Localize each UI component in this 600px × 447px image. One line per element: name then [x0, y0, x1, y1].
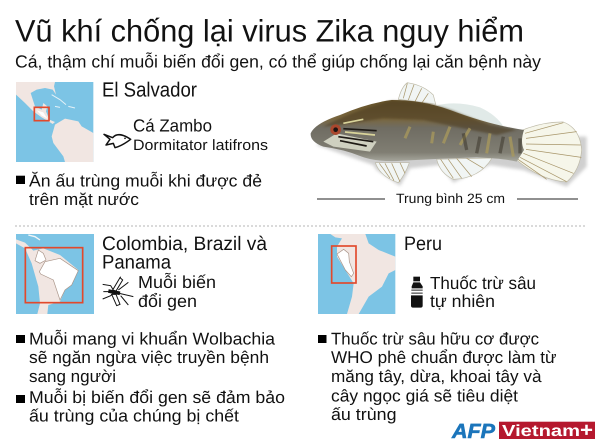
label: modified mosquito: [138, 272, 216, 311]
bullet text: trên mặt nước: [29, 190, 140, 209]
heading: Colombia, Brazil và Panama: Colombia, Brazil và: [102, 233, 267, 255]
bullet text: insecticide: măng tây, dừa, khoai tây và: [331, 367, 542, 386]
map: Peru: [318, 234, 395, 314]
icon: bottle: [411, 277, 423, 308]
species name: Cá Zambo: [133, 116, 212, 136]
icon: mosquito: [103, 277, 133, 306]
panel: Peru: [318, 233, 556, 424]
heading: Colombia, Brazil và Panama: [102, 233, 267, 274]
icon: fish: [104, 134, 131, 148]
bullet text: insecticide: WHO phê chuẩn được làm từ: [331, 348, 556, 367]
heading: Colombia, Brazil và Panama: Panama: [102, 252, 171, 274]
bullet text: insecticide: cây ngọc giá sẽ tiêu diệt: [331, 387, 518, 406]
bullet text: Wolbachia: sang người: [29, 367, 116, 386]
illustration: fish: [311, 83, 587, 187]
label: natural insecticide: tự nhiên: [430, 291, 495, 311]
bullet text: Wolbachia: Muỗi mang vi khuẩn Wolbachia: [29, 330, 276, 349]
logo: Vietnam+: Vietnam: [502, 423, 580, 440]
bullet text: larvae die: ấu trùng của chúng bị chết: [29, 407, 239, 426]
subtitle: Cá, thậm chí muỗi biến đổi gen, có thể giúp chống lại căn bệnh này: [15, 51, 541, 71]
label: modified mosquito: Muỗi biến: [138, 272, 216, 292]
bullet text: Wolbachia: sẽ ngăn ngừa việc truyền bệnh: [29, 348, 269, 367]
bullet text: insecticide: ấu trùng: [331, 405, 396, 424]
logo: Vietnam+: +: [580, 420, 593, 442]
logo: Vietnam+: [499, 420, 595, 442]
heading: El Salvador: El Salvador: [102, 79, 197, 102]
scientific name: Dormitator latifrons: [133, 137, 268, 154]
bullet text: [16, 172, 262, 209]
map: Central America: [16, 82, 93, 162]
bullet text: insecticide: Thuốc trừ sâu hữu cơ được: [331, 330, 539, 349]
logo: AFP: AFP: [451, 420, 495, 443]
bullet text: larvae die: Muỗi bị biến đổi gen sẽ đảm bảo: [29, 388, 285, 407]
label: natural insecticide: [430, 273, 536, 311]
map: South America: [16, 234, 94, 314]
title: Vũ khí chống lại virus Zika nguy hiểm: [15, 14, 524, 49]
panel: El Salvador: [16, 79, 268, 209]
label: natural insecticide: Thuốc trừ sâu: [430, 273, 536, 293]
panel: Colombia, Brazil, Panama: [16, 233, 285, 426]
bullet text: Wolbachia: [16, 330, 276, 386]
bullet text: larvae die: [16, 388, 285, 426]
bullet text: Ăn ấu trùng muỗi khi được đẻ: [29, 172, 262, 191]
size scale: Trung bình 25 cm: [396, 191, 505, 206]
label: modified mosquito: đổi gen: [138, 291, 197, 311]
heading: Peru: Peru: [404, 233, 442, 255]
bullet text: insecticide: [318, 330, 556, 424]
